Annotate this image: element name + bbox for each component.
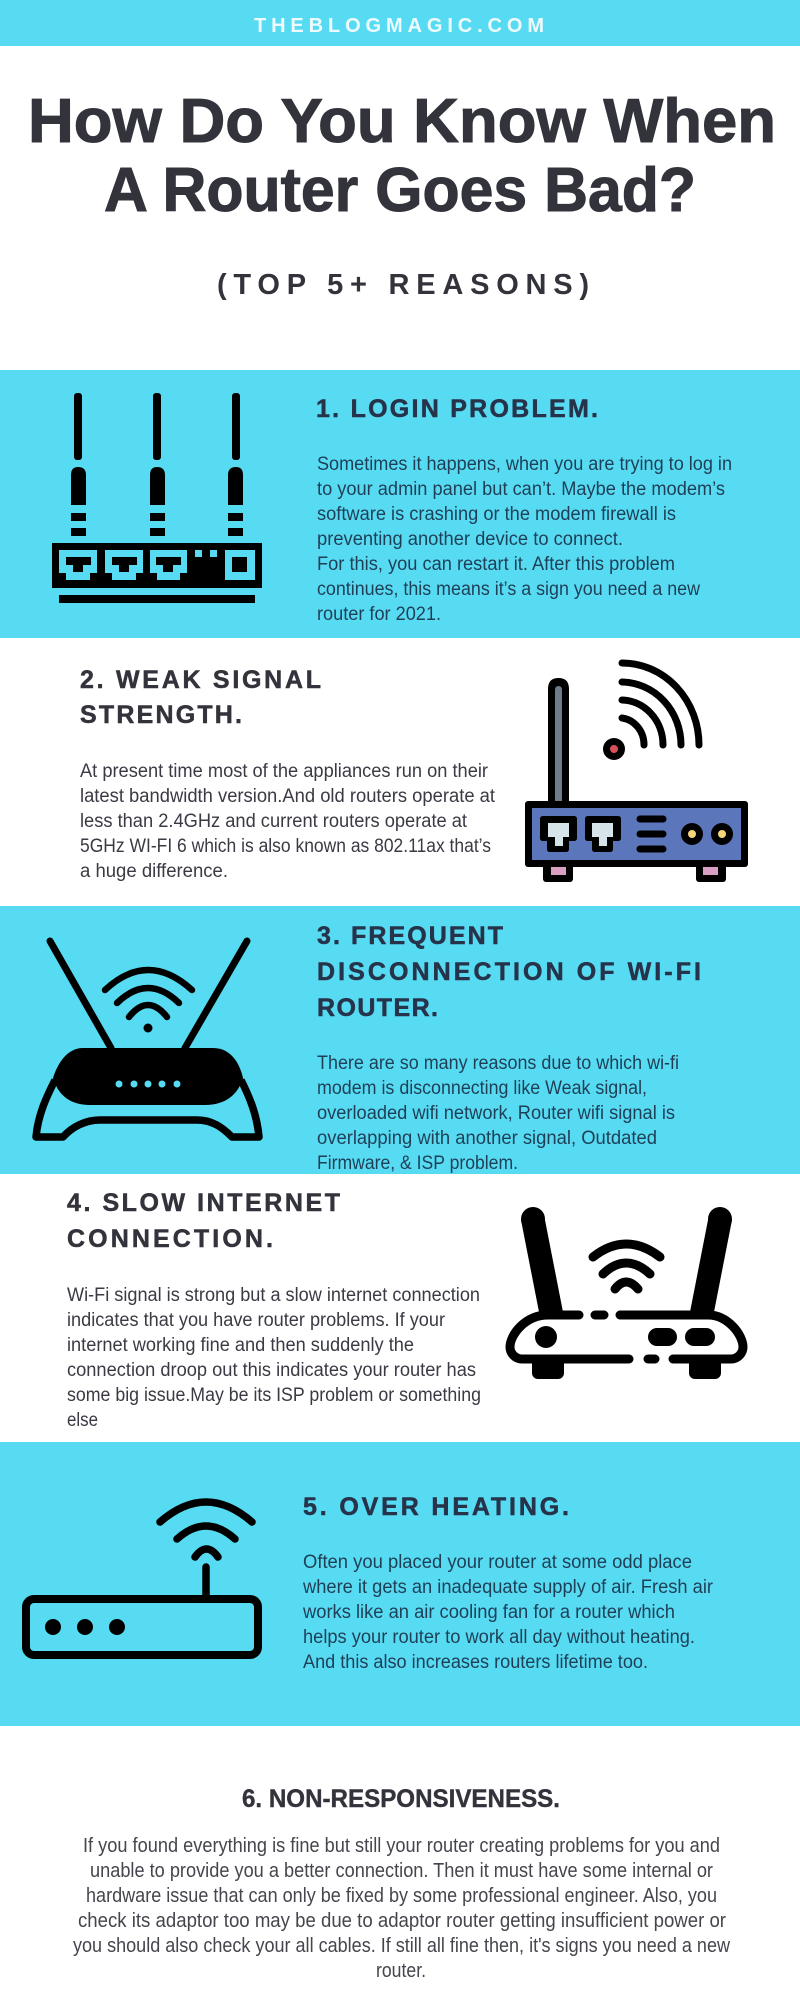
body text: And this also increases routers lifetime too. (303, 1652, 648, 1673)
panel: 5 over heating (0, 1442, 800, 1726)
body text: indicates that you have router problems. If your (67, 1310, 446, 1331)
body text: a huge difference. (80, 861, 228, 882)
body text: hardware issue that can only be fixed by some professional engineer. Also, you (86, 1885, 717, 1907)
heading: 4. SLOW INTERNET (67, 1189, 340, 1217)
body text: Sometimes it happens, when you are trying to log in (317, 454, 732, 475)
body text: preventing another device to connect. (317, 529, 623, 550)
panel: 3 frequent disconnection (0, 906, 800, 1174)
body text: internet working fine and then suddenly the (67, 1335, 414, 1356)
heading: ROUTER. (317, 994, 438, 1022)
body text (317, 454, 732, 625)
heading: 1. LOGIN PROBLEM. (316, 395, 598, 423)
body text: connection droop out this indicates your router has (67, 1360, 476, 1381)
body text: you should also check your all cables. If still all fine then, it's signs you need a new (73, 1935, 730, 1957)
body text: If you found everything is fine but still your router creating problems for you and (83, 1835, 720, 1857)
icon: coloured router with signal (525, 663, 748, 882)
body text: to your admin panel but can’t. Maybe the modem’s (317, 479, 725, 500)
title (28, 87, 776, 225)
body text: less than 2.4GHz and current routers operate at (80, 811, 468, 832)
body text: latest bandwidth version.And old routers operate at (80, 786, 496, 807)
body text: Often you placed your router at some odd place (303, 1552, 692, 1573)
body text: else (67, 1410, 98, 1431)
body text: continues, this means it’s a sign you need a new (317, 579, 700, 600)
heading: 6. NON-RESPONSIVENESS. (242, 1785, 560, 1813)
body text (67, 1285, 481, 1431)
heading: STRENGTH. (80, 701, 242, 729)
body text (302, 1552, 714, 1673)
panel: 1 login problem (0, 370, 800, 638)
body text: overloaded wifi network, Router wifi signal is (317, 1103, 675, 1124)
body text: works like an air cooling fan for a router which (302, 1602, 675, 1623)
heading: DISCONNECTION OF WI-FI (317, 958, 701, 986)
body text: unable to provide you a better connection. Then it must have some internal or (90, 1860, 713, 1882)
heading (80, 666, 321, 729)
heading: 5. OVER HEATING. (303, 1493, 569, 1521)
subtitle: (TOP 5+ REASONS) (217, 269, 589, 301)
body text: some big issue.May be its ISP problem or something (67, 1385, 481, 1406)
title: A Router Goes Bad? (104, 156, 696, 225)
body text (317, 1053, 679, 1174)
body text: modem is disconnecting like Weak signal, (317, 1078, 647, 1099)
body text: Wi-Fi signal is strong but a slow internet connection (67, 1285, 480, 1306)
heading (317, 922, 701, 1022)
body text: At present time most of the appliances run on their (80, 761, 489, 782)
site name: THEBLOGMAGIC.COM (254, 15, 544, 37)
header band (0, 0, 800, 46)
icon: router with angled antennas (36, 941, 259, 1137)
icon: router with thick antennas (510, 1207, 743, 1379)
body text: 5GHz WI-FI 6 which is also known as 802.11ax that’s (80, 836, 491, 857)
body text: router for 2021. (317, 604, 441, 625)
panel: 6 non-responsiveness (73, 1785, 730, 1982)
icon: router with three antennas (52, 393, 262, 603)
heading (67, 1189, 340, 1253)
body text: Firmware, & ISP problem. (317, 1153, 518, 1174)
heading: CONNECTION. (67, 1225, 273, 1253)
heading: 3. FREQUENT (317, 922, 503, 950)
body text: For this, you can restart it. After this problem (317, 554, 675, 575)
body text (73, 1835, 730, 1982)
icon: router with single antenna (26, 1502, 258, 1655)
body text (80, 761, 496, 882)
panel: 2 weak signal strength (80, 663, 748, 882)
heading: 2. WEAK SIGNAL (80, 666, 321, 694)
body text: where it gets an inadequate supply of air. Fresh air (302, 1577, 714, 1598)
body text: overlapping with another signal, Outdated (317, 1128, 657, 1149)
body text: check its adaptor too may be due to adaptor router getting insufficient power or (78, 1910, 726, 1932)
panel: 4 slow internet connection (0, 1174, 800, 1442)
body text: software is crashing or the modem firewall is (317, 504, 676, 525)
body text: router. (376, 1960, 426, 1982)
title: How Do You Know When (28, 87, 776, 156)
body text: There are so many reasons due to which wi-fi (317, 1053, 679, 1074)
body text: helps your router to work all day without heating. (303, 1627, 695, 1648)
